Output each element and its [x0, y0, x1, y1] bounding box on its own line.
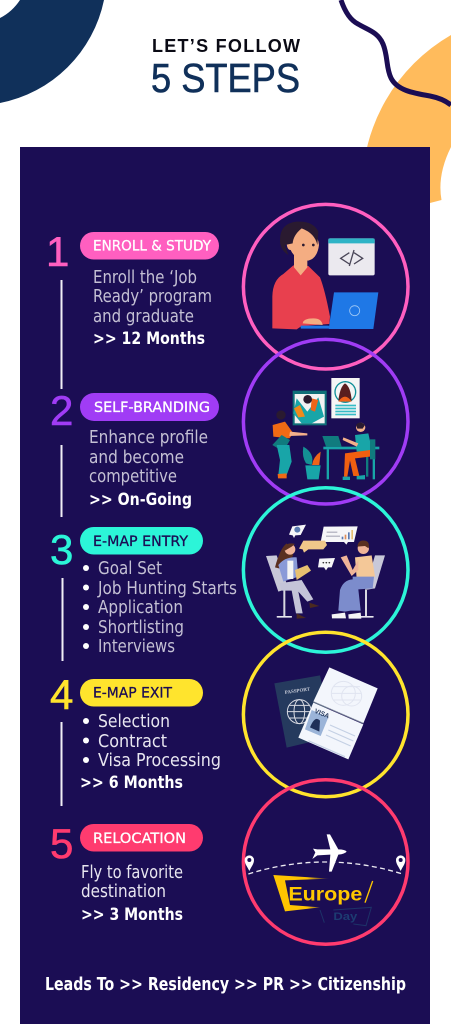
step 5 number: 5: [50, 820, 73, 867]
step 1 description: and graduate: [93, 307, 194, 327]
step 3 pill: [80, 527, 203, 554]
step 4: [50, 671, 221, 806]
step 4 connector line: [60, 722, 62, 806]
ring: step 2: [243, 339, 408, 504]
airplane: [312, 834, 347, 872]
step 1: [46, 228, 219, 389]
step 3 bullet list: Goal Set: [98, 559, 162, 579]
step 3 bullet list: Job Hunting Starts: [97, 579, 237, 599]
decoration: orange ring top-right: [362, 35, 451, 210]
step 4 bullet list: Visa Processing: [98, 751, 221, 771]
step 1 duration: >> 12 Months: [93, 329, 205, 349]
step 4 bullet list: Selection: [98, 712, 170, 732]
Europe frame: [273, 875, 330, 911]
step 2 pill: SELF-BRANDING: [94, 400, 210, 416]
step 1 pill: [80, 232, 219, 260]
title line 2: 5 STEPS: [151, 55, 300, 101]
slash: [365, 881, 373, 903]
step 3 bullet list: Application: [98, 598, 183, 618]
step 2: [50, 387, 219, 517]
decoration: navy ring top-left: [0, 0, 104, 103]
icon: person coding at laptop: [272, 222, 378, 329]
step 3 bullet list: [83, 559, 237, 657]
step 4 duration: >> 6 Months: [80, 773, 183, 793]
step 5 duration: >> 3 Months: [81, 905, 183, 925]
step 2 description: and become: [89, 448, 184, 468]
decoration: wavy line: [341, 0, 451, 105]
step 3 bullet list: Shortlisting: [98, 618, 184, 638]
step 2 description: competitive: [89, 467, 177, 487]
Day frame: [320, 907, 371, 926]
step 3 number: 3: [50, 526, 73, 573]
icon: passport and visa: PASSPORT: [285, 687, 311, 696]
step 4 pill: [80, 679, 203, 706]
step 4 bullet list: [83, 712, 221, 771]
icon: passport and visa: VISA: [313, 708, 330, 720]
step 2 connector line: [60, 445, 62, 517]
step 5 description: Fly to favorite: [81, 863, 183, 883]
left pin: [245, 855, 254, 871]
title line 1: LET’S FOLLOW: [152, 36, 300, 56]
step 1 description: [93, 268, 212, 327]
step 2 duration: >> On-Going: [89, 490, 192, 510]
step 2 description: [89, 428, 208, 487]
title: [151, 36, 300, 101]
ring: step 4: [243, 632, 408, 797]
step 2 number: 2: [50, 387, 73, 434]
step 3 bullet list: Interviews: [98, 637, 175, 657]
step 4 bullet list: Contract: [98, 732, 167, 752]
step 1 pill: ENROLL & STUDY: [93, 238, 211, 254]
Europe label: Europe: [288, 885, 363, 906]
step 4 number: 4: [50, 671, 73, 718]
step 2 description: Enhance profile: [89, 428, 208, 448]
step 4 pill: E-MAP EXIT: [93, 686, 172, 702]
step 1 connector line: [60, 280, 62, 389]
step 5: [50, 820, 203, 925]
ring: step 5: [243, 780, 408, 944]
step 1 description: Enroll the ‘Job: [93, 268, 197, 288]
step 1 description: Ready’ program: [93, 287, 212, 307]
step 5 pill: [80, 824, 203, 852]
icon: flight route to Europe: [245, 834, 405, 926]
step 3 pill: E-MAP ENTRY: [93, 534, 188, 550]
right pin: [396, 855, 405, 871]
icon: team self-branding scene: [272, 378, 379, 480]
main panel background: [20, 147, 430, 1024]
step 5 description: [81, 863, 183, 902]
icon: passport and visa: [274, 667, 378, 759]
icon: two people interview: [266, 525, 385, 619]
Day label: Day: [333, 911, 358, 923]
ring: step 1: [243, 204, 408, 369]
step 3 connector line: [62, 578, 64, 661]
step 1 number: 1: [46, 228, 69, 275]
ring: step 3: [243, 488, 408, 652]
step 5 pill: RELOCATION: [93, 831, 186, 847]
step 3: [50, 526, 237, 661]
step 2 pill: [80, 393, 219, 421]
step 5 description: destination: [81, 882, 166, 902]
flight path: [248, 862, 403, 874]
